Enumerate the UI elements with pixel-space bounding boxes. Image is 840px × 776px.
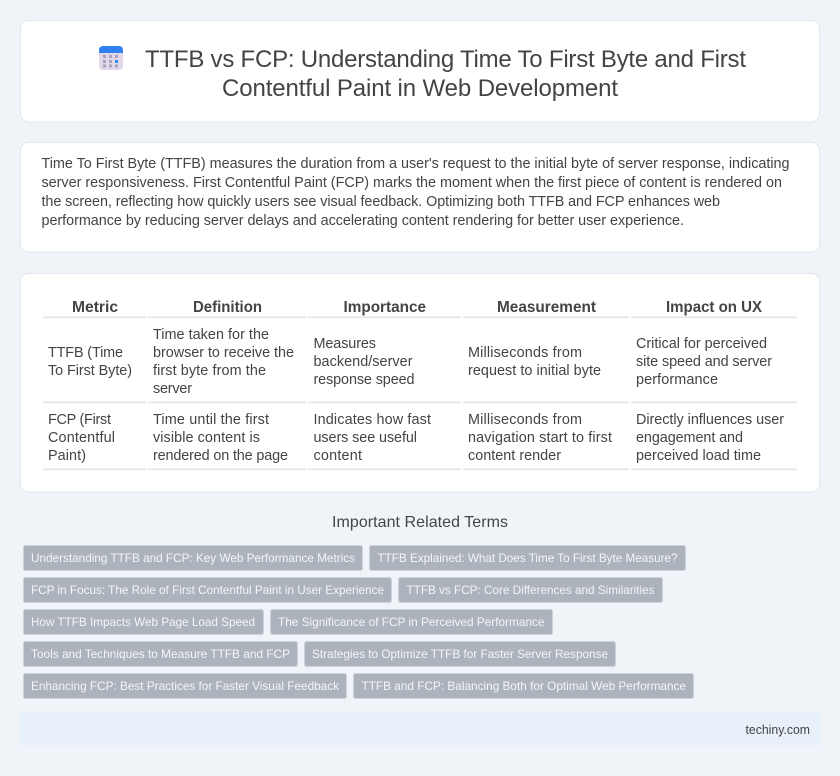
table row: TTFB: TTFB (Time bbox=[48, 345, 123, 361]
footer bbox=[20, 712, 820, 746]
tag list: related terms: TTFB vs FCP: Core Differences and Similarities bbox=[406, 583, 654, 597]
tag list: related terms: How TTFB Impacts Web Page Load Speed bbox=[31, 615, 255, 629]
text block: introduction paragraph: server responsiveness. First Contentful Paint (FCP) marks the moment when the first piece of content is rendered on bbox=[42, 175, 782, 191]
table row: FCP: rendered on the page bbox=[153, 448, 288, 464]
table row: TTFB: server bbox=[153, 381, 192, 397]
tag list: related terms bbox=[24, 546, 694, 698]
text block: introduction paragraph bbox=[42, 156, 790, 229]
table row: FCP: Milliseconds from bbox=[468, 412, 582, 428]
table row: TTFB: To First Byte) bbox=[48, 363, 132, 379]
tag list: related terms: Tools and Techniques to Measure TTFB and FCP bbox=[31, 647, 290, 661]
table row: FCP: Time until the first bbox=[153, 412, 269, 428]
table row: TTFB bbox=[48, 327, 772, 397]
panel: title header bbox=[20, 20, 820, 122]
table row: FCP: Indicates how fast bbox=[314, 412, 431, 428]
table header row: Measurement bbox=[497, 299, 597, 316]
heading: important related terms: Important Related Terms bbox=[332, 514, 508, 531]
table row: FCP bbox=[48, 412, 784, 464]
table header row: Importance bbox=[344, 299, 426, 316]
panel: comparison table bbox=[20, 274, 820, 492]
table header row: Metric bbox=[72, 299, 118, 316]
tag list: related terms: Understanding TTFB and FCP: Key Web Performance Metrics bbox=[31, 551, 355, 565]
table row: FCP: FCP (First bbox=[48, 412, 111, 428]
table row: FCP: visible content is bbox=[153, 430, 260, 446]
table row: TTFB: Critical for perceived bbox=[636, 336, 767, 352]
title: Contentful Paint in Web Development bbox=[222, 75, 618, 102]
text block: introduction paragraph: Time To First Byte (TTFB) measures the duration from a user's request to the initial byte of server response, indicating bbox=[42, 156, 790, 172]
table row: TTFB: backend/server bbox=[314, 354, 413, 370]
table header row: Impact on UX bbox=[666, 299, 762, 316]
table header row: Definition bbox=[193, 299, 262, 316]
table row: TTFB: first byte from the bbox=[153, 363, 266, 379]
footer: techiny.com bbox=[746, 722, 810, 737]
table row: TTFB: response speed bbox=[314, 372, 414, 388]
tag list: related terms: The Significance of FCP in Perceived Performance bbox=[278, 615, 545, 629]
table row: TTFB: Milliseconds from bbox=[468, 345, 582, 361]
tag list: related terms: Enhancing FCP: Best Practices for Faster Visual Feedback bbox=[31, 679, 340, 693]
title: TTFB vs FCP: Understanding Time To First Byte and First bbox=[145, 46, 746, 73]
table row: TTFB: site speed and server bbox=[636, 354, 772, 370]
table row: FCP: users see useful bbox=[314, 430, 417, 446]
table row: FCP: perceived load time bbox=[636, 448, 761, 464]
icon: calendar bbox=[99, 46, 123, 70]
tag list: related terms: FCP in Focus: The Role of First Contentful Paint in User Experience bbox=[31, 583, 384, 597]
text block: introduction paragraph: performance by reducing server delays and accelerating content rendering for better user experience. bbox=[42, 213, 684, 229]
table header row bbox=[72, 299, 762, 316]
table row: FCP: Contentful bbox=[48, 430, 115, 446]
table row: TTFB: request to initial byte bbox=[468, 363, 601, 379]
tag list: related terms: Strategies to Optimize TTFB for Faster Server Response bbox=[312, 647, 608, 661]
table row: TTFB: browser to receive the bbox=[153, 345, 294, 361]
title bbox=[145, 46, 746, 102]
table row: FCP: Directly influences user bbox=[636, 412, 784, 428]
table row: FCP: navigation start to first bbox=[468, 430, 612, 446]
table row: TTFB: Measures bbox=[314, 336, 376, 352]
table row: FCP: engagement and bbox=[636, 430, 743, 446]
panel: introduction bbox=[20, 142, 820, 252]
text block: introduction paragraph: the screen, reflecting how quickly users see visual feedback. Optimizing both TTFB and FCP enhances web bbox=[42, 194, 720, 210]
tag list: related terms: TTFB and FCP: Balancing Both for Optimal Web Performance bbox=[362, 679, 686, 693]
table row: TTFB: performance bbox=[636, 372, 718, 388]
table row: FCP: content bbox=[314, 448, 362, 464]
table row: FCP: Paint) bbox=[48, 448, 86, 464]
table row: FCP: content render bbox=[468, 448, 561, 464]
table row: TTFB: Time taken for the bbox=[153, 327, 269, 343]
tag list: related terms: TTFB Explained: What Does Time To First Byte Measure? bbox=[378, 551, 678, 565]
